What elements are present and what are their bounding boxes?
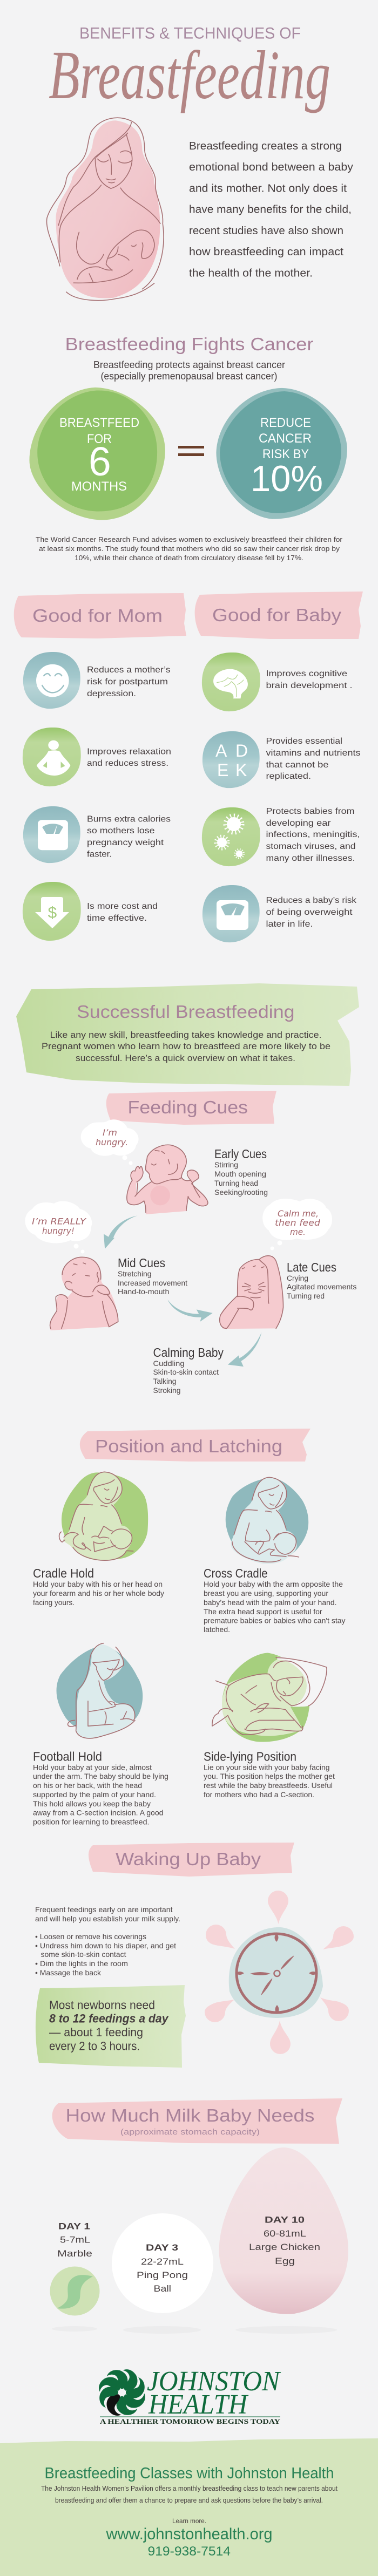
footer panel: breastfeeding classes: Breastfeeding Classes with Johnston Health (44, 2465, 334, 2482)
cancer research text: The World Cancer Research Fund advises women to exclusively breastfeed their children for (36, 535, 343, 543)
heading: breastfeeding fights cancer (65, 334, 313, 382)
benefit: essential vitamins: replicated. (266, 772, 311, 781)
benefit: relaxation (23, 728, 171, 786)
thought bubble: calm me, then feed me: me. (290, 1227, 306, 1237)
text: mid cues: Stretching (118, 1269, 151, 1278)
text: side-lying position: you. This position helps the mother get (204, 1772, 335, 1780)
thought bubble: I'm really hungry (25, 1201, 92, 1253)
panel: successful breastfeeding: successful. Here’s a quick overview on what it takes. (76, 1053, 295, 1063)
text: cross cradle: baby’s head with the palm of your hand. (204, 1598, 337, 1607)
banner: position and latching: Position and Latching (95, 1436, 282, 1456)
benefit: overweight risk: of being overweight (266, 908, 353, 917)
benefit: burns calories (23, 806, 171, 863)
text: cradle hold: Hold your baby with his or her head on (33, 1580, 163, 1588)
text: calming baby (153, 1345, 224, 1395)
benefit: burns calories: Burns extra calories (87, 815, 171, 824)
text: mid cues (118, 1256, 187, 1296)
thought bubble: calm me, then feed me: Calm me, (278, 1208, 319, 1219)
benefit: cost and time: time effective. (87, 914, 147, 923)
text: football hold: This hold allows you keep the baby (33, 1799, 151, 1808)
intro text: recent studies have also shown (189, 225, 343, 237)
text: early cues: Seeking/rooting (214, 1188, 268, 1197)
text: calming baby: Stroking (153, 1386, 180, 1395)
thought bubble: calm me, then feed me (262, 1199, 332, 1250)
text: football hold (33, 1750, 168, 1826)
panel: successful breastfeeding (16, 983, 359, 1086)
text: cradle hold: your forearm and his or her whole body (33, 1589, 164, 1598)
stomach size: day 3 ping pong ball: Ping Pong (137, 2270, 188, 2280)
panel: successful breastfeeding: Like any new skill, breastfeeding takes knowledge and practice. (50, 1030, 322, 1040)
footer panel: breastfeeding classes: The Johnston Health Women’s Pavilion offers a monthly breastfeeding class to teach new parents about (41, 2485, 338, 2492)
thought bubble: I'm hungry (81, 1119, 139, 1165)
benefit: relaxation: and reduces stress. (87, 759, 168, 768)
callout: feedings a day: 8 to 12 feedings a day (49, 2012, 169, 2025)
thought bubble: I'm really hungry: hungry! (42, 1226, 75, 1236)
intro text: have many benefits for the child, (189, 204, 352, 216)
logo: johnston health: JOHNSTON (147, 2366, 281, 2397)
intro text: and its mother. Not only does it (189, 182, 347, 194)
text: early cues: Mouth opening (214, 1170, 266, 1178)
stomach size: day 3 ping pong ball: 22-27mL (141, 2256, 184, 2267)
benefit: essential vitamins: Provides essential (266, 737, 342, 746)
benefit: brain development: brain development . (266, 681, 352, 690)
text: cross cradle (204, 1566, 346, 1634)
benefit: overweight risk: Reduces a baby’s risk (266, 896, 357, 905)
text: frequent feedings: and will help you establish your milk supply. (35, 1914, 180, 1923)
icon: clock with drops (205, 1891, 354, 2054)
green circle: breastfeed for 6 months: BREASTFEED (59, 416, 139, 430)
logo: johnston health (96, 2366, 281, 2425)
banner: waking up baby (89, 1843, 294, 1877)
banner: how much milk baby needs (52, 2098, 342, 2144)
benefit: essential vitamins: K (235, 760, 247, 780)
arrow: mid to late cues (167, 1300, 213, 1322)
text: cradle hold: facing yours. (33, 1598, 75, 1607)
banner: how much milk baby needs: (approximate stomach capacity) (120, 2128, 260, 2137)
green circle: breastfeed for 6 months: 6 (89, 439, 111, 484)
text: calming baby: Skin-to-skin contact (153, 1368, 219, 1376)
stomach size: day 3 ping pong ball: DAY 3 (146, 2242, 178, 2253)
equals sign (178, 446, 204, 456)
text: frequent feedings: some skin-to-skin contact (41, 1950, 126, 1959)
intro text: emotional bond between a baby (189, 161, 353, 173)
text: side-lying position: rest while the baby breastfeeds. Useful (204, 1781, 333, 1790)
thought bubble: I'm hungry: hungry. (96, 1137, 128, 1147)
illustration: cross cradle (226, 1477, 308, 1564)
benefit: cost and time: $ (48, 904, 57, 922)
footer panel: breastfeeding classes (0, 2438, 378, 2576)
benefit: postpartum depression: Reduces a mother’s (87, 665, 171, 675)
benefit: protects from illness: infections, meningitis, (266, 830, 360, 839)
title: BENEFITS & TECHNIQUES OF (79, 25, 301, 42)
benefit: burns calories: pregnancy weight (87, 838, 164, 847)
text: calming baby: Talking (153, 1377, 176, 1385)
stomach size: day 10 chicken egg: Large Chicken (249, 2242, 320, 2252)
text: frequent feedings: • Loosen or remove his coverings (35, 1932, 146, 1941)
callout: feedings a day (36, 1985, 186, 2068)
banner: position and latching (80, 1429, 310, 1462)
banner: good for mom (14, 593, 186, 638)
teal circle: reduce cancer risk by 10%: REDUCE (260, 416, 311, 430)
text: calming baby: Calming Baby (153, 1345, 224, 1360)
intro text: how breastfeeding can impact (189, 246, 343, 258)
benefit: overweight risk (202, 885, 357, 942)
text: early cues (214, 1147, 268, 1197)
intro text: Breastfeeding creates a strong (189, 140, 342, 152)
teal circle: reduce cancer risk by 10%: RISK BY (262, 447, 309, 461)
footer panel: breastfeeding classes: breastfeeding and offer them a chance to prepare and ask questions before the baby’s arrival. (55, 2497, 323, 2504)
benefit: essential vitamins: A (215, 741, 227, 760)
text: early cues: Stirring (214, 1160, 238, 1169)
text: football hold: on his or her back, with the head (33, 1781, 142, 1790)
logo: johnston health: HEALTH (148, 2389, 248, 2420)
text: early cues: Early Cues (214, 1147, 267, 1161)
text: cross cradle: Hold your baby with the arm opposite the (204, 1580, 343, 1588)
benefit: protects from illness: many other illnesses. (266, 854, 355, 863)
footer panel: breastfeeding classes: Learn more. (172, 2517, 206, 2525)
benefit: brain development (202, 653, 352, 711)
panel: successful breastfeeding: Pregnant women who learn how to breastfeed are more likely to be (42, 1041, 330, 1051)
heading: breastfeeding fights cancer: (especially premenopausal breast cancer) (100, 371, 278, 382)
text: side-lying position: Lie on your side with your baby facing (204, 1763, 329, 1771)
text: frequent feedings: • Massage the back (35, 1968, 102, 1977)
text: football hold: under the arm. The baby should be lying (33, 1772, 168, 1780)
stomach size: day 10 chicken egg: 60-81mL (264, 2228, 306, 2239)
thought bubble: calm me, then feed me: then feed (275, 1218, 321, 1228)
cancer research text: 10%, while their chance of death from circulatory disease fell by 17%. (75, 554, 303, 562)
stomach size: day 3 ping pong ball: Ball (153, 2283, 171, 2294)
cancer research text (36, 535, 343, 562)
logo: johnston health: A HEALTHIER TOMORROW BEGINS TODAY (100, 2417, 281, 2425)
illustration: baby early cues (127, 1145, 208, 1214)
stomach size: day 10 chicken egg (219, 2147, 348, 2334)
benefit: postpartum depression: risk for postpartum (87, 677, 168, 687)
illustration: football hold (57, 1643, 143, 1738)
benefit: burns calories: faster. (87, 849, 112, 859)
text: football hold: Football Hold (33, 1750, 102, 1764)
text: side-lying position (204, 1750, 335, 1799)
stomach size: day 1 marble: 5-7mL (60, 2234, 90, 2245)
teal circle: reduce cancer risk by 10%: 10% (251, 458, 323, 499)
text: cradle hold: Cradle Hold (33, 1566, 94, 1580)
green circle: breastfeed for 6 months (29, 388, 165, 520)
benefit: essential vitamins: that cannot be (266, 760, 329, 770)
benefit: essential vitamins: D (235, 741, 248, 760)
text: mid cues: Hand-to-mouth (118, 1287, 170, 1296)
stomach size: day 1 marble: Marble (57, 2248, 92, 2259)
benefit: essential vitamins (202, 731, 361, 788)
stomach size: day 10 chicken egg: Egg (275, 2256, 295, 2266)
illustration: side-lying position (212, 1653, 327, 1742)
cancer research text: at least six months. The study found that mothers who did so saw their cancer risk drop by (39, 545, 340, 553)
banner: waking up baby: Waking Up Baby (116, 1849, 261, 1869)
banner: good for mom: Good for Mom (32, 606, 163, 626)
benefit: cost and time (23, 882, 158, 941)
banner: feeding cues: Feeding Cues (127, 1097, 248, 1117)
green circle: breastfeed for 6 months: FOR (87, 432, 112, 446)
text: late cues: Late Cues (287, 1260, 336, 1274)
illustration: baby mid cues (50, 1257, 118, 1330)
text: cross cradle: latched. (204, 1625, 230, 1634)
text: frequent feedings: • Dim the lights in the room (35, 1959, 128, 1968)
text: cross cradle: breast you are using, supporting your (204, 1589, 328, 1598)
arrow: early to mid cues (104, 1215, 137, 1249)
intro text: the health of the mother. (189, 268, 313, 280)
footer panel: breastfeeding classes: www.johnstonhealth.org (106, 2525, 272, 2543)
text: late cues: Turning red (287, 1292, 325, 1300)
thought bubble: I'm really hungry: I’m REALLY (32, 1216, 86, 1226)
text: football hold: away from a C-section incision. A good (33, 1808, 163, 1817)
benefit: overweight risk: later in life. (266, 920, 313, 929)
text: side-lying position: for mothers who had a C-section. (204, 1790, 314, 1799)
intro text (189, 140, 353, 280)
text: calming baby: Cuddling (153, 1359, 185, 1368)
callout: feedings a day: — about 1 feeding (49, 2026, 143, 2039)
benefit: burns calories: so mothers lose (87, 826, 155, 835)
text: frequent feedings (35, 1905, 180, 1977)
benefit: essential vitamins: vitamins and nutrients (266, 749, 361, 758)
text: football hold: position for learning to breastfeed. (33, 1818, 149, 1826)
arrow: late cues to calming baby (228, 1333, 261, 1367)
text: cradle hold (33, 1566, 164, 1607)
benefit: protects from illness: stomach viruses, and (266, 842, 355, 851)
text: late cues: Crying (287, 1274, 308, 1282)
text: side-lying position: Side-lying Position (204, 1750, 296, 1764)
banner: feeding cues (106, 1091, 276, 1125)
heading: breastfeeding fights cancer: Breastfeeding Fights Cancer (65, 334, 313, 354)
teal circle: reduce cancer risk by 10% (216, 388, 347, 519)
heading: breastfeeding fights cancer: Breastfeeding protects against breast cancer (93, 359, 285, 370)
stomach size: day 10 chicken egg: DAY 10 (265, 2215, 305, 2225)
text: cross cradle: premature babies or babies who can't stay (204, 1616, 346, 1625)
benefit: protects from illness: developing ear (266, 819, 331, 828)
text: late cues: Agitated movements (287, 1282, 356, 1291)
panel: successful breastfeeding: Successful Breastfeeding (77, 1002, 295, 1022)
text: cross cradle: The extra head support is useful for (204, 1607, 322, 1616)
text: mid cues: Mid Cues (118, 1256, 165, 1270)
banner: good for baby (195, 592, 363, 639)
teal circle: reduce cancer risk by 10%: CANCER (259, 431, 312, 446)
text: cross cradle: Cross Cradle (204, 1566, 268, 1580)
callout: feedings a day: every 2 to 3 hours. (49, 2039, 140, 2053)
stomach size: day 3 ping pong ball (112, 2213, 213, 2334)
text: late cues (287, 1260, 356, 1300)
banner: how much milk baby needs: How Much Milk Baby Needs (66, 2105, 314, 2125)
benefit: essential vitamins: E (217, 760, 228, 780)
text: early cues: Turning head (214, 1179, 258, 1187)
benefit: brain development: Improves cognitive (266, 669, 347, 678)
benefit: relaxation: Improves relaxation (87, 747, 171, 757)
benefit: postpartum depression (23, 652, 171, 709)
banner: good for baby: Good for Baby (212, 605, 342, 625)
stomach size: day 1 marble: DAY 1 (58, 2221, 90, 2231)
callout: feedings a day: Most newborns need (49, 1998, 155, 2012)
benefit: postpartum depression: depression. (87, 689, 136, 698)
illustration: mother and baby (46, 118, 164, 301)
text: football hold: Hold your baby at your side, almost (33, 1763, 152, 1771)
footer panel: breastfeeding classes: 919-938-7514 (148, 2544, 231, 2559)
green circle: breastfeed for 6 months: MONTHS (71, 479, 127, 494)
text: frequent feedings: Frequent feedings early on are important (35, 1905, 173, 1914)
benefit: protects from illness: Protects babies from (266, 807, 354, 816)
text: frequent feedings: • Undress him down to his diaper, and get (35, 1941, 176, 1950)
text: football hold: supported by the palm of your hand. (33, 1790, 156, 1799)
text: mid cues: Increased movement (118, 1279, 187, 1287)
benefit: cost and time: Is more cost and (87, 902, 158, 911)
illustration: cradle hold (59, 1472, 148, 1561)
benefit: protects from illness (202, 807, 360, 866)
stomach size: day 1 marble (50, 2221, 99, 2332)
illustration: baby late cues (220, 1256, 284, 1329)
thought bubble: I'm hungry: I’m (103, 1127, 117, 1138)
